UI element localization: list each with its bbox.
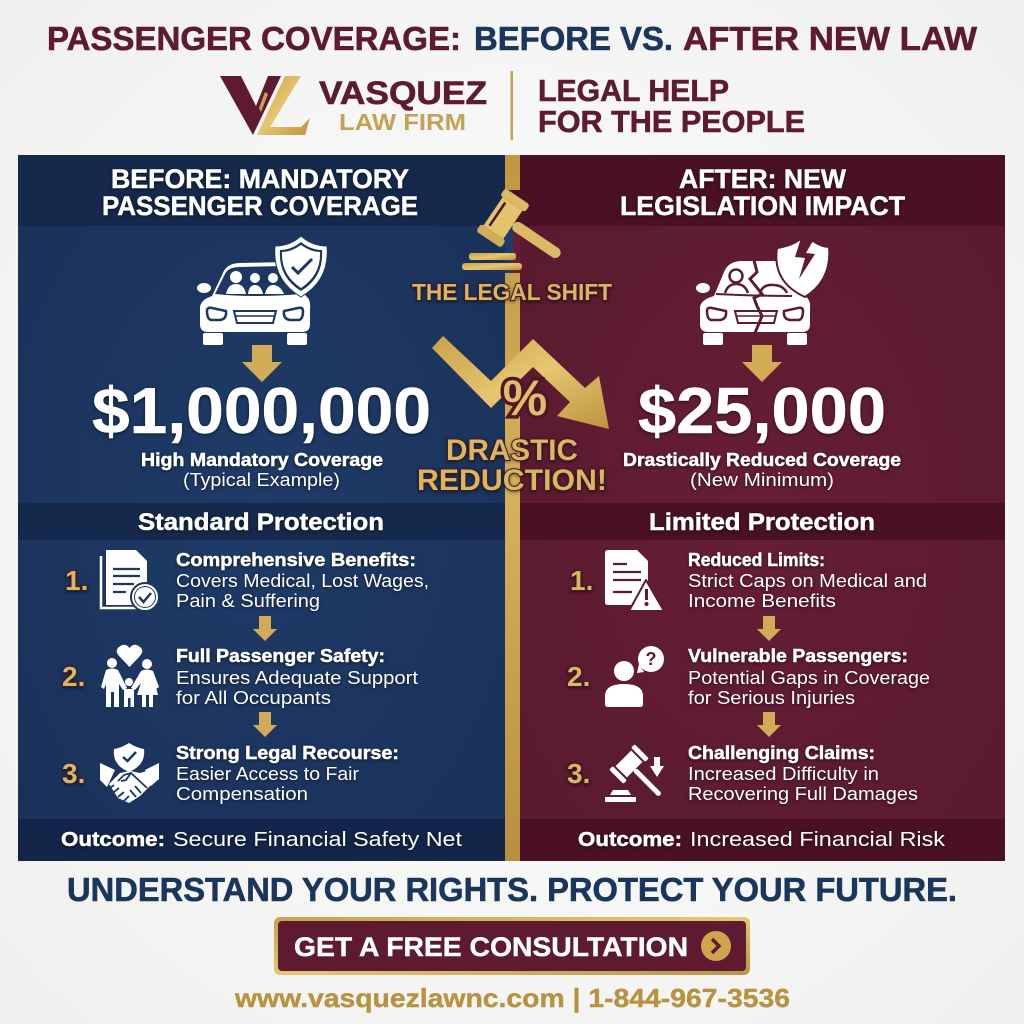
amount: before xyxy=(92,374,431,490)
big downward arrow xyxy=(432,336,609,429)
panel: before xyxy=(18,155,506,861)
number 1: 1. xyxy=(570,565,593,596)
heading: before: PASSENGER COVERAGE xyxy=(102,191,418,221)
label: drastic reduction: DRASTIC xyxy=(446,434,578,467)
text 2: Vulnerable Passengers: xyxy=(688,646,908,666)
amount: before: High Mandatory Coverage xyxy=(141,450,383,470)
icon: person with question bubble: ? xyxy=(646,649,656,669)
outcome: before xyxy=(61,829,463,851)
arrow: before to amount xyxy=(242,345,282,382)
firm name xyxy=(319,75,487,135)
text 3: Challenging Claims: xyxy=(688,743,875,763)
label: drastic reduction xyxy=(417,434,607,497)
text 3 xyxy=(688,743,918,804)
icon: person with question bubble xyxy=(605,646,664,707)
icon: shield and handshake xyxy=(100,743,159,803)
tagline: FOR THE PEOPLE xyxy=(538,104,805,139)
number 3: 3. xyxy=(567,758,590,789)
arrow 1 xyxy=(253,616,277,641)
number 3: 3. xyxy=(62,758,85,789)
outcome: after xyxy=(578,829,946,851)
amount: before: (Typical Example) xyxy=(183,470,340,490)
text 1: Reduced Limits: xyxy=(688,550,825,570)
text 2: for Serious Injuries xyxy=(688,688,855,708)
tagline xyxy=(538,73,805,139)
icon: car with passengers and shield xyxy=(197,236,327,345)
outcome: after: Increased Financial Risk xyxy=(690,829,946,851)
heading: after xyxy=(620,164,906,221)
outcome: after: Outcome: xyxy=(578,829,682,851)
amount: after: Drastically Reduced Coverage xyxy=(623,450,901,470)
text 3: Increased Difficulty in xyxy=(688,764,879,784)
title: PASSENGER COVERAGE: xyxy=(47,20,461,57)
text 1: Pain & Suffering xyxy=(176,591,320,611)
title xyxy=(47,20,978,57)
button: free consultation: GET A FREE CONSULTATION xyxy=(294,932,688,962)
amount: after xyxy=(623,374,901,490)
title: BEFORE VS. xyxy=(474,20,673,57)
text 2: for All Occupants xyxy=(176,688,331,708)
text 2: Full Passenger Safety: xyxy=(176,646,385,666)
firm name: VASQUEZ xyxy=(319,75,487,111)
amount: after: $25,000 xyxy=(638,374,886,447)
text 3: Compensation xyxy=(176,784,308,804)
text 1 xyxy=(688,550,927,611)
icon: chevron xyxy=(701,931,731,961)
arrow 2 xyxy=(253,712,277,737)
arrow 2 xyxy=(757,712,781,737)
text 3: Easier Access to Fair xyxy=(176,764,359,784)
text 3: Strong Legal Recourse: xyxy=(176,743,399,763)
icon: broken car with cracked shield xyxy=(696,235,829,345)
text 2 xyxy=(176,646,418,708)
text 1: Comprehensive Benefits: xyxy=(176,550,416,570)
label: the legal shift: THE LEGAL SHIFT xyxy=(412,279,612,305)
icon: document with check xyxy=(101,550,159,611)
panel: after xyxy=(519,155,1005,861)
button: free consultation xyxy=(274,917,750,975)
icon: gavel xyxy=(462,188,574,278)
arrow 1 xyxy=(757,616,781,641)
amount: after: (New Minimum) xyxy=(690,470,834,490)
text 1: Strict Caps on Medical and xyxy=(688,571,927,591)
number 2: 2. xyxy=(62,661,85,692)
icon: gavel with down arrow xyxy=(605,744,673,808)
heading: after: AFTER: NEW xyxy=(679,164,846,194)
call to action heading: UNDERSTAND YOUR RIGHTS. PROTECT YOUR FUTURE. xyxy=(67,871,957,908)
amount: before: $1,000,000 xyxy=(92,374,431,447)
firm name: LAW FIRM xyxy=(339,109,466,135)
text 1 xyxy=(176,550,429,611)
logo: Vasquez Law Firm xyxy=(220,75,487,135)
percent badge: % xyxy=(503,370,547,426)
subheading: standard protection: Standard Protection xyxy=(138,509,384,536)
subheading: limited protection: Limited Protection xyxy=(649,509,875,536)
tagline: LEGAL HELP xyxy=(538,73,729,108)
list: after xyxy=(567,550,930,808)
text 3: Recovering Full Damages xyxy=(688,784,918,804)
label: drastic reduction: REDUCTION! xyxy=(417,464,607,497)
title: AFTER NEW LAW xyxy=(683,20,978,57)
text 2: Ensures Adequate Support xyxy=(176,668,418,688)
heading: before xyxy=(102,164,418,221)
icon: document with warning xyxy=(605,550,664,611)
contact line: www.vasquezlawnc.com | 1-844-967-3536 xyxy=(234,983,790,1013)
text 1: Income Benefits xyxy=(688,591,836,611)
text 2 xyxy=(688,646,930,708)
heading: after: LEGISLATION IMPACT xyxy=(620,191,906,221)
number 2: 2. xyxy=(567,661,590,692)
text 2: Potential Gaps in Coverage xyxy=(688,668,930,688)
icon: family with heart xyxy=(101,645,159,707)
text 3 xyxy=(176,743,399,804)
arrow: after to amount xyxy=(742,345,782,382)
heading: before: BEFORE: MANDATORY xyxy=(111,164,409,194)
text 1: Covers Medical, Lost Wages, xyxy=(176,571,429,591)
number 1: 1. xyxy=(65,565,88,596)
list: before xyxy=(62,550,429,804)
outcome: before: Secure Financial Safety Net xyxy=(173,829,463,851)
outcome: before: Outcome: xyxy=(61,829,165,851)
